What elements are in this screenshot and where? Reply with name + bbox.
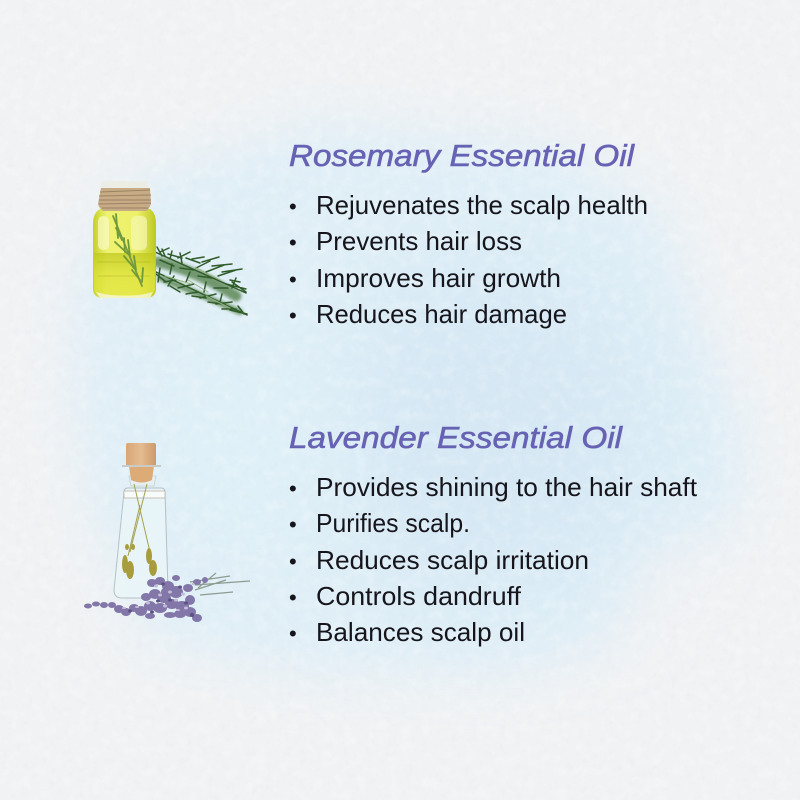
bullet list: rosemary benefits: • — [289, 194, 297, 219]
bullet list: rosemary benefits — [289, 190, 648, 329]
bullet list: rosemary benefits: • — [289, 303, 297, 328]
heading: rosemary: Rosemary Essential Oil — [289, 138, 635, 173]
lavender stems — [190, 573, 250, 595]
lid — [101, 181, 148, 192]
bullet list: lavender benefits: • — [289, 621, 297, 646]
bullet list: lavender benefits: Balances scalp oil — [316, 617, 525, 647]
bullet list: lavender benefits — [289, 472, 698, 647]
bullet list: rosemary benefits: Prevents hair loss — [316, 226, 522, 256]
submerged sprig — [113, 214, 143, 286]
oil level — [94, 253, 155, 295]
stems in bottle — [128, 484, 150, 556]
twine — [98, 188, 151, 211]
bullet list: lavender benefits: • — [289, 512, 297, 537]
rosemary sprigs — [155, 247, 247, 315]
section: rosemary essential oil — [289, 138, 648, 329]
bullet list: lavender benefits: • — [289, 585, 297, 610]
bullet list: lavender benefits: Controls dandruff — [316, 581, 522, 611]
icon: lavender oil bottle — [84, 443, 250, 622]
jar body — [93, 209, 156, 298]
bottle — [114, 488, 168, 598]
bullet list: rosemary benefits: Improves hair growth — [316, 263, 561, 293]
bullet list: lavender benefits: Purifies scalp. — [316, 508, 470, 538]
bullet list: rosemary benefits: Reduces hair damage — [316, 299, 567, 329]
cork — [126, 443, 156, 466]
bullet list: rosemary benefits: • — [289, 230, 297, 255]
bullet list: lavender benefits: • — [289, 476, 297, 501]
section: lavender essential oil — [289, 420, 698, 647]
lavender flowers — [84, 575, 208, 622]
bullet list: lavender benefits: Provides shining to the hair shaft — [316, 472, 698, 502]
bullet list: rosemary benefits: • — [289, 267, 297, 292]
bullet list: lavender benefits: Reduces scalp irritation — [316, 545, 589, 575]
icon: rosemary oil jar — [93, 181, 247, 315]
bullet list: rosemary benefits: Rejuvenates the scalp health — [316, 190, 648, 220]
heading: lavender: Lavender Essential Oil — [289, 420, 623, 455]
bullet list: lavender benefits: • — [289, 549, 297, 574]
